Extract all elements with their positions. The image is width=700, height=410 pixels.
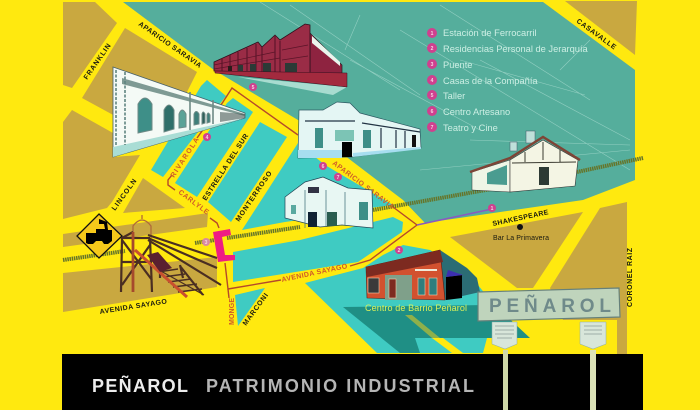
- building: Centro de Barrio: [366, 250, 480, 300]
- legend: [427, 28, 589, 133]
- icon: train warning sign: [77, 214, 122, 258]
- route lines: [168, 88, 417, 298]
- illustration: bridge: [121, 215, 221, 297]
- legend item 5: 5: [431, 93, 434, 99]
- legend item 3: 3: [431, 62, 434, 68]
- dark teal shadow: [343, 305, 530, 353]
- marker 5: [249, 83, 257, 91]
- olive strip: [405, 315, 440, 338]
- panel: teal blocks: [151, 80, 490, 353]
- building: Taller: [214, 24, 347, 95]
- marker 1: [488, 204, 496, 212]
- marker 3: [202, 238, 210, 246]
- sign plate left: [492, 322, 517, 349]
- marker 1: 1: [491, 206, 494, 212]
- sign plate right: [580, 322, 606, 349]
- legend item 5: [427, 90, 465, 101]
- legend item 3: Puente: [443, 60, 472, 70]
- railway: [63, 158, 643, 260]
- map number markers: [202, 83, 496, 254]
- marker 5: 5: [252, 85, 255, 91]
- legend item 4: 4: [431, 78, 434, 84]
- sign text: PEÑAROL: [489, 295, 611, 317]
- text: Centro de Barrio Peñarol: Centro de Barrio Peñarol: [365, 303, 467, 313]
- legend item 3: [427, 59, 472, 70]
- street labels: [83, 18, 634, 327]
- street labels: RIVAROLA: [170, 137, 201, 179]
- marker 4: 4: [206, 135, 209, 141]
- marker 2: [395, 246, 403, 254]
- sign: Peñarol: [478, 288, 620, 410]
- marker 3: 3: [205, 240, 208, 246]
- decorative track lines: [260, 2, 630, 170]
- building: Casas de la Compañía: [113, 67, 245, 157]
- legend item 6: 6: [431, 109, 434, 115]
- marker 2: 2: [398, 248, 401, 254]
- street labels: CASAVALLE: [575, 18, 617, 51]
- street labels: ESTRELLA DEL SUR: [202, 133, 250, 202]
- legend item 1: 1: [431, 31, 434, 37]
- legend item 2: 2: [431, 46, 434, 52]
- building: Estación house: [470, 131, 580, 192]
- icon: Bar La Primavera dot: [517, 224, 523, 230]
- street labels: CORONEL RAIZ: [627, 247, 634, 307]
- street labels: Bar La Primavera: [493, 235, 549, 242]
- sign post right: [590, 350, 596, 410]
- marker 6: 6: [322, 164, 325, 170]
- street labels: LINCOLN: [111, 178, 138, 212]
- sign post left: [503, 350, 508, 410]
- panel: railway land: [123, 2, 635, 223]
- marker 6: [319, 162, 327, 170]
- street labels: SHAKESPEARE: [492, 209, 549, 228]
- street labels: CARLYLE: [177, 189, 210, 216]
- legend item 2: Residencias Personal de Jerarquía: [443, 44, 589, 54]
- sign panel: [478, 288, 620, 321]
- marker 4: [203, 133, 211, 141]
- legend item 1: Estación de Ferrocarril: [443, 28, 537, 38]
- street labels: AVENIDA SAYAGO: [99, 298, 168, 316]
- street labels: MONGE: [229, 298, 236, 325]
- route to Estación: [417, 209, 492, 225]
- title bar: [62, 354, 643, 410]
- street labels: APARICIO SARAVIA: [331, 160, 395, 211]
- marker 7: 7: [337, 175, 340, 181]
- legend item 5: Taller: [443, 91, 465, 101]
- building: Estación Peñarol: [298, 102, 421, 158]
- pink bridge marker: [213, 229, 235, 262]
- street labels: APARICIO SARAVIA: [137, 21, 202, 70]
- legend item 6: Centro Artesano: [443, 107, 510, 117]
- yellow strip: [432, 338, 463, 353]
- street labels: AVENIDA SAYAGO: [281, 263, 348, 284]
- legend item 4: Casas de la Compañía: [443, 76, 538, 86]
- subtitle: Patrimonio Industrial: PATRIMONIO INDUSTRIAL: [206, 376, 474, 396]
- building: Centro Artesano: [285, 177, 373, 228]
- street labels: MARCONI: [242, 292, 270, 327]
- street labels: FRANKLIN: [83, 43, 113, 81]
- marker 7: [334, 173, 342, 181]
- legend item 7: Teatro y Cine: [443, 123, 498, 133]
- title: Peñarol: PEÑAROL: [92, 375, 188, 396]
- legend item 7: 7: [431, 125, 434, 131]
- street labels: MONTERROSO: [235, 170, 274, 223]
- panel: city blocks: [63, 1, 637, 354]
